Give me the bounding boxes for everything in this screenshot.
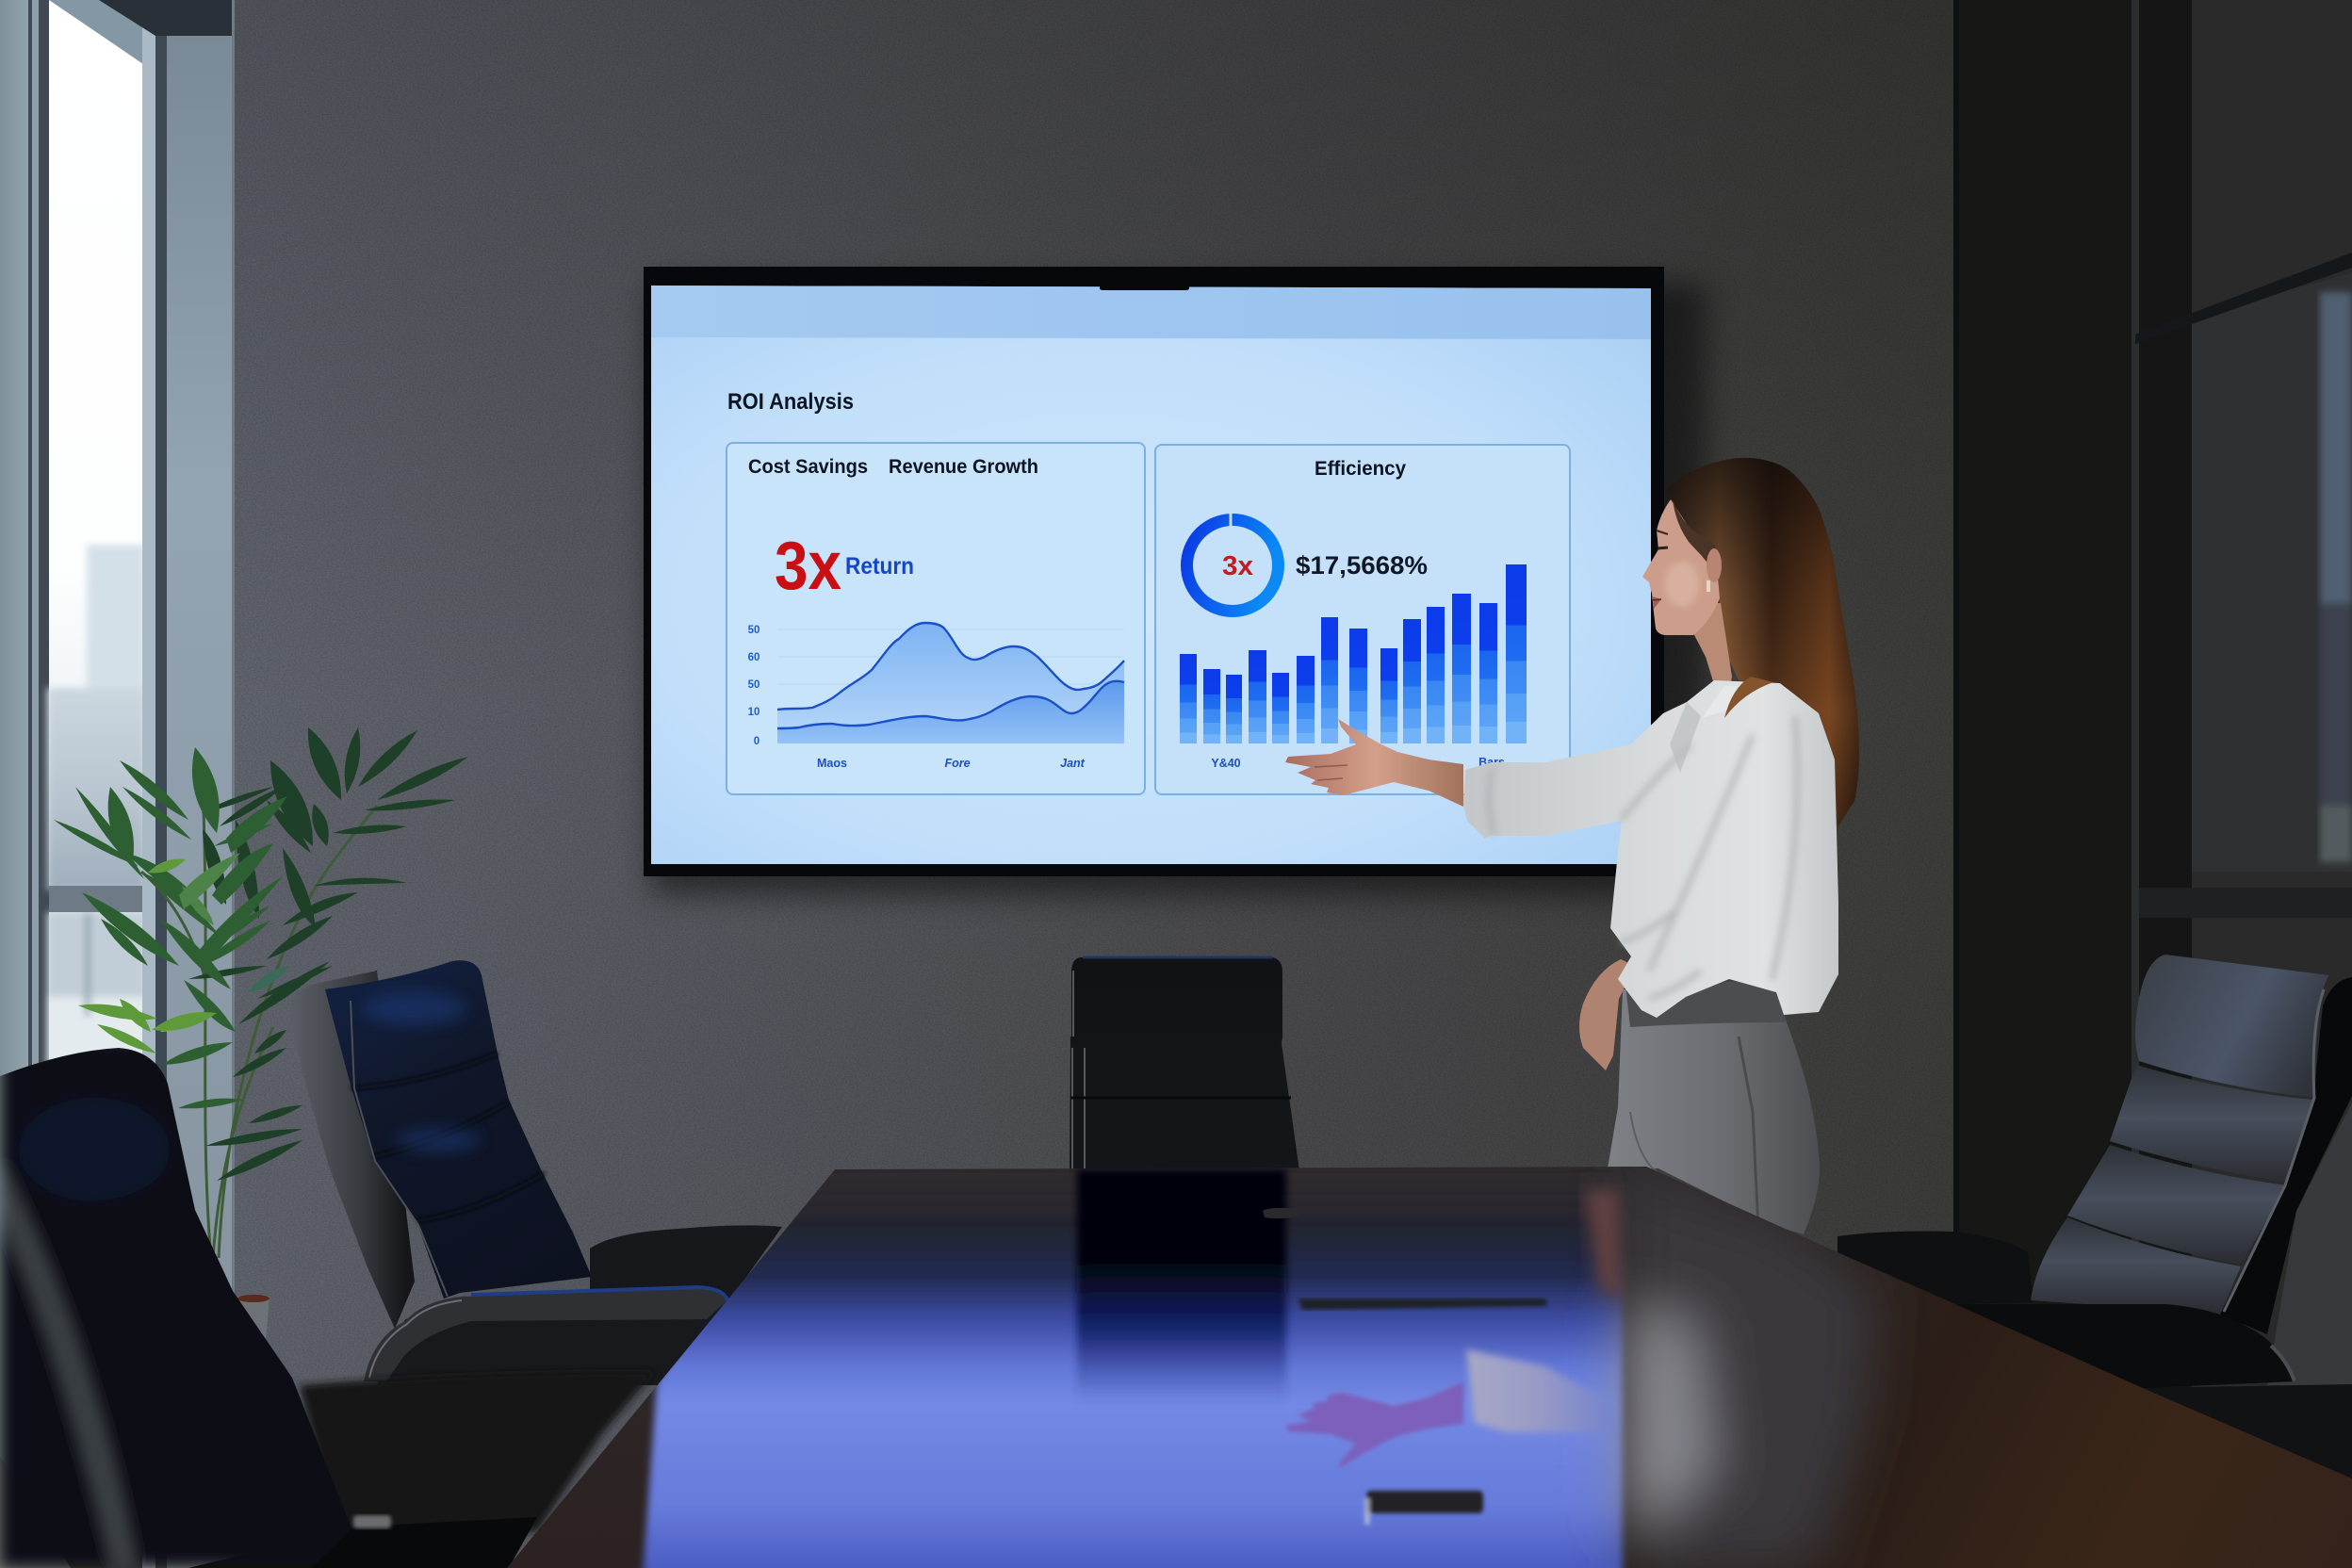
center chair bbox=[1070, 957, 1300, 1178]
far armrest bbox=[1838, 1232, 2034, 1304]
callout: 3x return: 3x bbox=[775, 529, 841, 604]
x axis labels: Fore bbox=[944, 757, 971, 770]
ear and earring bbox=[1707, 548, 1722, 582]
wall bbox=[234, 0, 1954, 1568]
x axis labels: Maos bbox=[817, 757, 847, 770]
panel heading: cost savings: Cost Savings bbox=[748, 456, 868, 478]
screen bbox=[651, 286, 1651, 864]
panel heading: revenue growth: Revenue Growth bbox=[889, 456, 1038, 478]
lower arm bbox=[2143, 1384, 2352, 1478]
bar chart axis labels: Y&40 bbox=[1211, 757, 1241, 770]
panel: efficiency bbox=[1155, 445, 1570, 794]
face bbox=[1642, 499, 1720, 635]
woman bbox=[1285, 458, 1859, 1234]
hand reflection bbox=[1285, 1381, 1463, 1469]
x axis labels bbox=[817, 757, 1086, 770]
hand and forearm bbox=[1285, 719, 1463, 807]
back cushion bbox=[325, 960, 592, 1298]
left chair bbox=[289, 960, 782, 1385]
blouse folds bbox=[1489, 716, 1797, 999]
dark leaves bbox=[188, 727, 468, 1181]
glass reflection bbox=[2192, 273, 2352, 872]
right column and glass wall bbox=[1953, 0, 2352, 1568]
sleeve reflection bbox=[1466, 1349, 1613, 1432]
left hanging arm and hand bbox=[1579, 959, 1635, 1070]
pale leaves bbox=[179, 853, 289, 992]
phone on table bbox=[1364, 1491, 1483, 1525]
boardroom table bbox=[507, 1167, 2352, 1568]
blouse bbox=[1463, 680, 1838, 1018]
callout: 3x return bbox=[775, 529, 914, 604]
callout: 3x return: Return bbox=[845, 553, 914, 580]
skyline through window bbox=[47, 545, 145, 1082]
seat bbox=[377, 1291, 735, 1385]
wood tone right side bbox=[1621, 1167, 2352, 1568]
y axis labels: 50 bbox=[748, 679, 760, 691]
panel heading: efficiency: Efficiency bbox=[1315, 458, 1406, 480]
pot bbox=[237, 1297, 270, 1340]
temple hair shadow bbox=[1673, 499, 1719, 577]
second cushion bbox=[2110, 1065, 2313, 1183]
x axis labels: Jant bbox=[1060, 757, 1086, 770]
center chair reflection bbox=[1077, 1169, 1286, 1405]
right chair bbox=[1838, 955, 2352, 1478]
mid green leaves bbox=[54, 747, 287, 1108]
back shell bbox=[289, 971, 415, 1329]
hair back bbox=[1665, 458, 1859, 827]
y axis labels: 10 bbox=[748, 707, 760, 718]
efficiency figure: $17,5668% bbox=[1296, 551, 1428, 580]
bar chart axis labels: Bars bbox=[1478, 756, 1505, 769]
y axis labels: 60 bbox=[748, 652, 760, 663]
far seat bbox=[300, 1372, 655, 1545]
blue screen reflection bbox=[641, 1169, 1623, 1568]
bright leaves bbox=[78, 859, 217, 1054]
tablet on table bbox=[1298, 1298, 1547, 1310]
stems bbox=[141, 806, 377, 1258]
small round device bbox=[1263, 1208, 1298, 1218]
bar chart axis labels bbox=[1211, 756, 1505, 770]
area chart bbox=[748, 623, 1124, 770]
slide title: ROI Analysis bbox=[727, 389, 854, 415]
headrest bbox=[2135, 955, 2329, 1098]
y axis labels bbox=[748, 625, 760, 747]
donut chart: 3x bbox=[1222, 551, 1253, 581]
shell bbox=[2220, 977, 2352, 1334]
hair strand over collar bbox=[1724, 677, 1773, 718]
fourth cushion bbox=[2031, 1217, 2241, 1314]
webcam notch bbox=[1100, 285, 1189, 290]
panel: cost savings and revenue growth bbox=[727, 443, 1145, 794]
neck bbox=[1661, 603, 1732, 773]
foreground chair, blurred bbox=[0, 1037, 655, 1568]
collar and v-neck bbox=[1670, 702, 1701, 773]
y axis labels: 50 bbox=[748, 625, 760, 636]
window and left pillar bbox=[0, 0, 235, 1568]
bar chart bbox=[1180, 564, 1527, 743]
TV shadow bbox=[650, 283, 1706, 895]
header band bbox=[651, 286, 1651, 339]
eye, brow, lips bbox=[1657, 531, 1668, 534]
floor corner bbox=[0, 1456, 71, 1568]
donut chart bbox=[1187, 511, 1278, 611]
right back panel bbox=[2267, 1102, 2352, 1385]
near armrest bbox=[1955, 1304, 2296, 1388]
third cushion bbox=[2067, 1145, 2287, 1265]
y axis labels: 0 bbox=[754, 736, 760, 747]
wall TV bbox=[644, 267, 1664, 876]
woman reflection bbox=[1623, 1168, 1875, 1568]
near armrest bbox=[364, 1287, 727, 1381]
plant bbox=[54, 727, 468, 1340]
trousers bbox=[1608, 985, 1820, 1234]
far armrest bbox=[590, 1225, 782, 1319]
